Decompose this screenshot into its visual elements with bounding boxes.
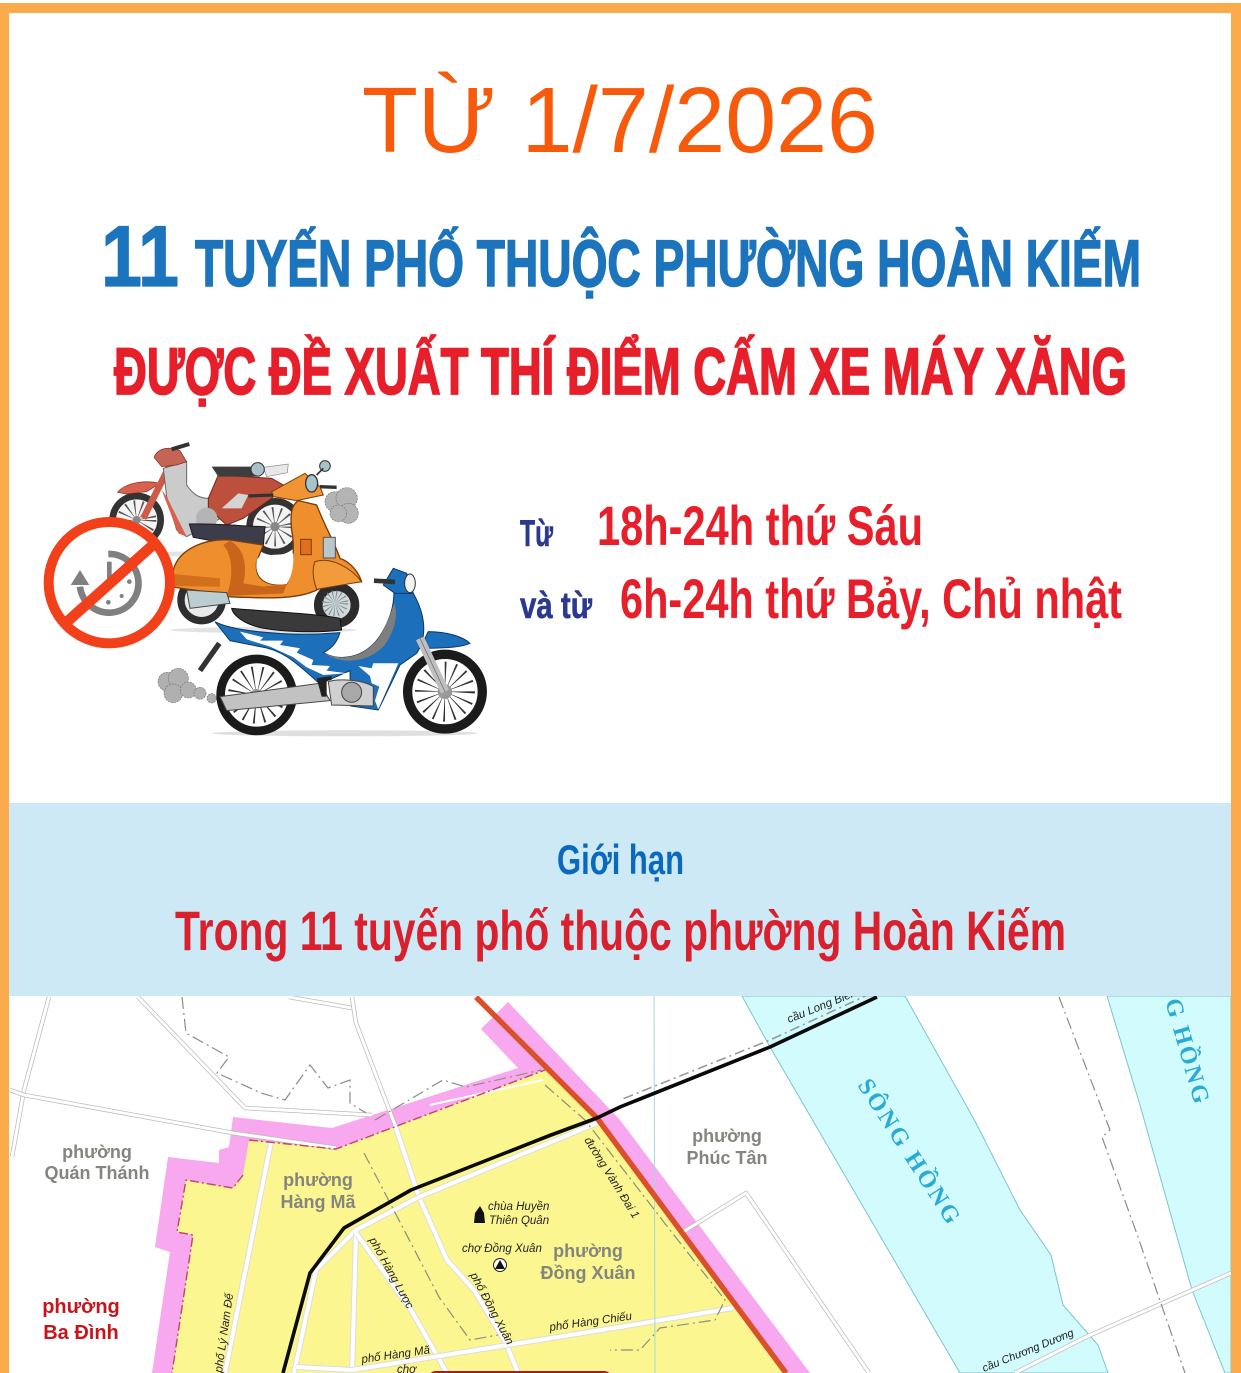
label: Ba Dinh: Ba Đình (43, 1322, 119, 1344)
label: Phuc Tan: phường (692, 1126, 762, 1146)
label: Dong Xuan market: chợ Đồng Xuân (462, 1243, 542, 1255)
railway (283, 993, 877, 1373)
street labels: phố Đồng Xuân (467, 1270, 515, 1347)
river: main Red River (742, 996, 1108, 1373)
label: Dong Xuan: phường (553, 1241, 623, 1261)
icon: smoke (325, 488, 358, 523)
panel: scope band (9, 803, 1231, 996)
street labels: phố Hàng Lược (366, 1235, 416, 1311)
region: pink boundary band (152, 1002, 810, 1373)
region: yellow ward (172, 1070, 786, 1373)
street labels: phố Hàng Mã (360, 1344, 431, 1366)
label: Song Hong east: G HỒNG (1159, 995, 1216, 1108)
street labels: đường Vành Đai 1 (581, 1135, 641, 1221)
label: Huyen Thien temple (474, 1201, 549, 1227)
label: Phuc Tan: Phúc Tân (686, 1148, 768, 1168)
icon: orange scooter (170, 461, 362, 633)
vertical grid line (654, 996, 655, 1373)
label: Huyen Thien temple: chùa Huyền (488, 1201, 549, 1213)
label: Quan Thanh: phường (62, 1142, 132, 1162)
icon: blue motorbike (158, 568, 482, 736)
street labels (213, 987, 1076, 1373)
illustration: motorbikes (49, 444, 482, 736)
text: time frame: 18h-24h thứ Sáu (597, 494, 923, 557)
text: time frame: và từ (520, 585, 592, 626)
heading: 11 streets (101, 209, 1141, 305)
boundary dashes (172, 997, 1185, 1373)
label: Hang Ma: phường (283, 1170, 353, 1190)
label: Ba Dinh: phường (42, 1296, 120, 1318)
text: time frame (520, 494, 1122, 630)
label: Dong Xuan: Đồng Xuân (540, 1263, 636, 1283)
label: Huyen Thien temple: Thiên Quân (489, 1215, 549, 1227)
label: Hang Ma: Hàng Mã (280, 1192, 356, 1212)
icon: red motorbike (113, 444, 300, 557)
street labels: phố Lý Nam Đế (213, 1291, 236, 1373)
red ring road (476, 997, 786, 1373)
street labels: phố Hàng Chiếu (548, 1310, 633, 1334)
street labels: cầu Long Biên (786, 987, 858, 1026)
inner roads (225, 997, 733, 1373)
heading: 11 streets: 11 (101, 209, 179, 305)
red callout top edge (428, 1371, 612, 1373)
icon: clock (71, 554, 138, 613)
river: eastern branch (1107, 996, 1231, 1373)
label: Song Hong: SÔNG HỒNG (852, 1074, 967, 1231)
text: limit label: Giới hạn (557, 836, 684, 883)
text: time frame: Từ (520, 513, 553, 554)
title: date: TỪ 1/7/2026 (362, 68, 878, 172)
icon: no-entry time sign (49, 522, 170, 643)
label: Quan Thanh: Quán Thánh (44, 1163, 150, 1183)
label: Dong Xuan market (462, 1243, 542, 1272)
map: Hoan Kiem area (9, 987, 1231, 1373)
outer roads (10, 997, 1231, 1373)
icon: exhaust smoke (158, 668, 216, 703)
